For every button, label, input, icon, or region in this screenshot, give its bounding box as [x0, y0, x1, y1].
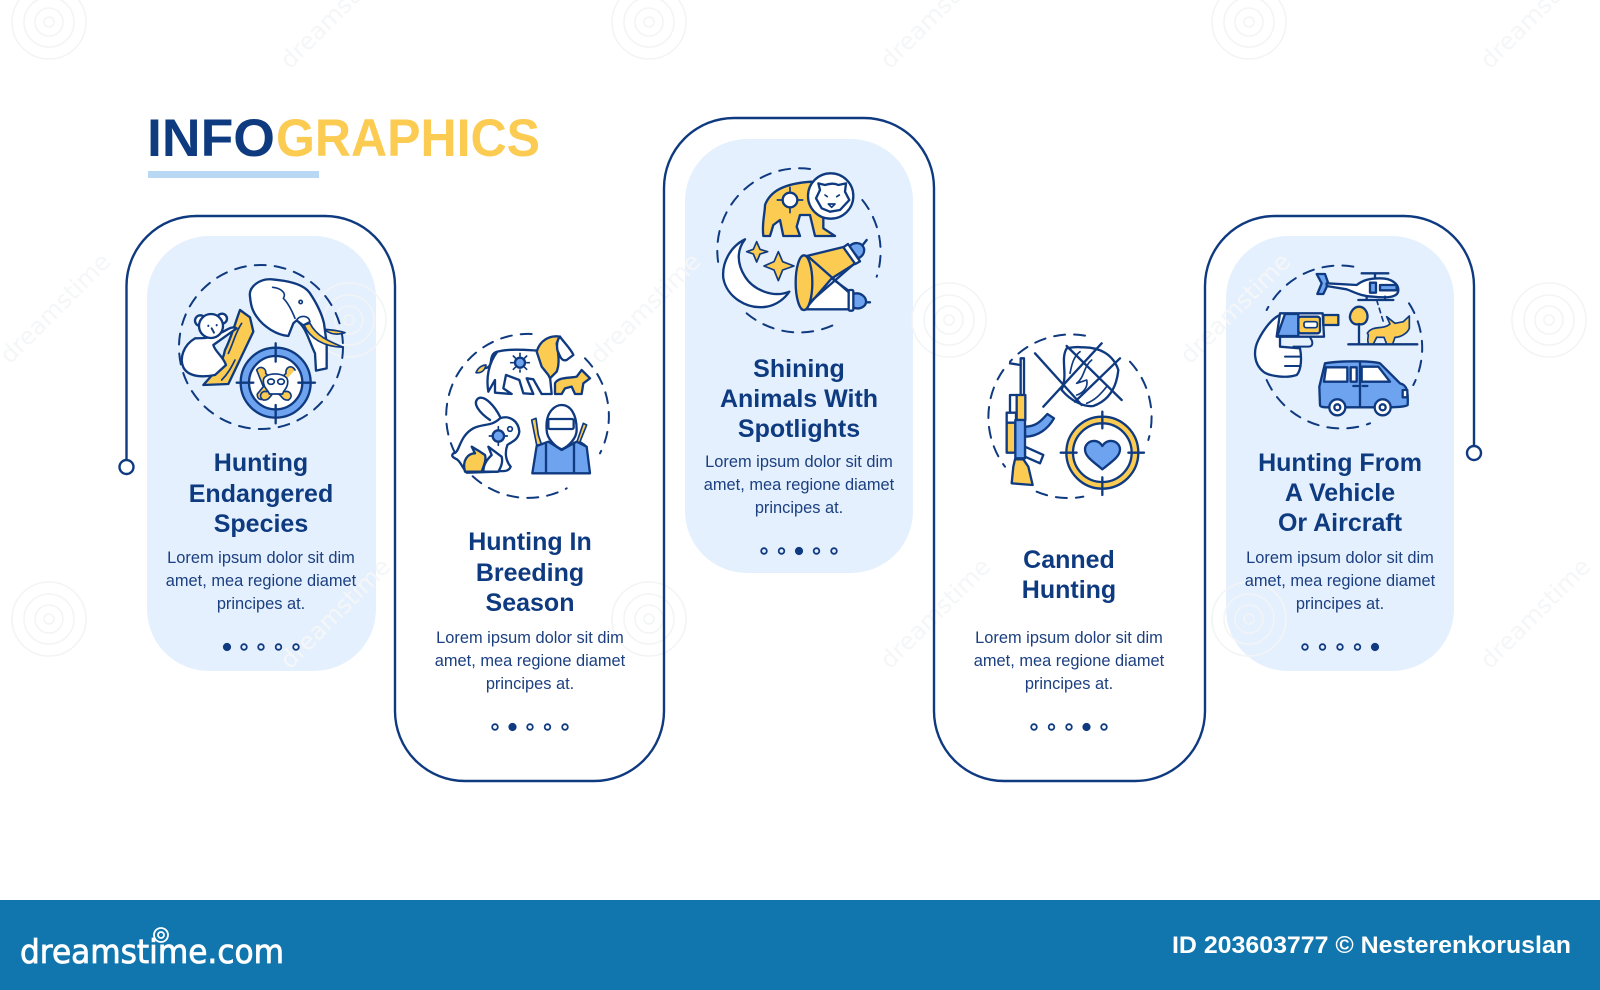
- timeline end dot: [1467, 446, 1481, 460]
- icon: canned hunting: [988, 334, 1152, 498]
- text: lorem shining animals: principes at.: [755, 499, 843, 517]
- footer logo text: dreamstime.com: [20, 932, 284, 971]
- footer bar: [0, 900, 1600, 990]
- title: shining animals with spotlights: Shining: [753, 355, 845, 383]
- title: hunting from a vehicle or aircraft: [1258, 449, 1422, 537]
- title: hunting in breeding season: Hunting In: [468, 528, 592, 556]
- title: hunting from a vehicle or aircraft: Hunting From: [1258, 449, 1422, 477]
- text: lorem endangered species: Lorem ipsum dolor sit dim: [167, 549, 355, 567]
- title: hunting in breeding season: Breeding: [476, 559, 584, 587]
- panel: shining animals background: [685, 139, 913, 573]
- title: hunting endangered species: Hunting: [214, 449, 308, 477]
- icon: breeding season: [446, 334, 609, 498]
- title: hunting from a vehicle or aircraft: Or Aircraft: [1278, 509, 1403, 537]
- title: canned hunting: Hunting: [1022, 576, 1116, 604]
- text: lorem vehicle or aircraft: principes at.: [1296, 595, 1384, 613]
- text: lorem breeding season: amet, mea regione diamet: [435, 652, 626, 670]
- text: lorem endangered species: [166, 549, 357, 613]
- step dots 4: [1031, 724, 1107, 730]
- icon: vehicle or aircraft: [1255, 266, 1422, 428]
- connecting timeline outline: [126, 118, 1474, 781]
- panel: vehicle or aircraft background: [1226, 236, 1454, 671]
- title: shining animals with spotlights: Spotlights: [738, 415, 860, 443]
- title: shining animals with spotlights: Animals With: [720, 385, 878, 413]
- text: lorem shining animals: amet, mea regione diamet: [704, 476, 895, 494]
- step dots 2: [492, 724, 568, 730]
- title: shining animals with spotlights: [720, 355, 878, 443]
- heading: GRAPHICS: [276, 109, 540, 168]
- title: canned hunting: Canned: [1023, 546, 1115, 574]
- text: lorem canned hunting: [974, 629, 1165, 693]
- title: hunting from a vehicle or aircraft: A Vehicle: [1285, 479, 1395, 507]
- title: hunting endangered species: [189, 449, 333, 538]
- text: lorem vehicle or aircraft: [1245, 549, 1436, 613]
- panel: endangered species background: [147, 236, 376, 671]
- text: lorem breeding season: Lorem ipsum dolor sit dim: [436, 629, 624, 647]
- watermark text: dreamstime: [1174, 248, 1296, 369]
- title: hunting in breeding season: [468, 528, 592, 617]
- timeline start dot: [120, 460, 134, 474]
- text: lorem breeding season: [435, 629, 626, 693]
- heading: [147, 109, 540, 168]
- heading underline: [148, 171, 319, 178]
- text: lorem endangered species: principes at.: [217, 595, 305, 613]
- text: lorem endangered species: amet, mea regione diamet: [166, 572, 357, 590]
- footer logo spiral: [154, 928, 168, 942]
- step dots 1: [224, 644, 299, 650]
- icon: shining animals: [717, 168, 881, 332]
- watermark text: [0, 0, 1596, 674]
- watermark text: dreamstime: [584, 248, 706, 369]
- footer credit: ID 203603777 © Nesterenkoruslan: [1172, 932, 1571, 959]
- text: lorem canned hunting: Lorem ipsum dolor sit dim: [975, 629, 1163, 647]
- text: lorem canned hunting: principes at.: [1025, 675, 1113, 693]
- title: canned hunting: [1022, 546, 1116, 604]
- text: lorem breeding season: principes at.: [486, 675, 574, 693]
- heading: INFO: [147, 109, 275, 168]
- text: lorem canned hunting: amet, mea regione diamet: [974, 652, 1165, 670]
- title: hunting in breeding season: Season: [486, 589, 574, 617]
- watermark text: dreamstime: [274, 553, 396, 674]
- text: lorem vehicle or aircraft: Lorem ipsum dolor sit dim: [1246, 549, 1434, 567]
- text: lorem shining animals: [704, 453, 895, 517]
- title: hunting endangered species: Endangered: [189, 480, 333, 508]
- watermark text: dreamstime: [1474, 553, 1596, 674]
- text: lorem vehicle or aircraft: amet, mea regione diamet: [1245, 572, 1436, 590]
- watermark spirals: [12, 0, 1586, 656]
- step dots 5: [1302, 644, 1378, 650]
- watermark text: dreamstime: [874, 553, 996, 674]
- text: lorem shining animals: Lorem ipsum dolor sit dim: [705, 453, 893, 471]
- title: hunting endangered species: Species: [214, 510, 308, 538]
- icon: endangered species: [179, 265, 345, 429]
- step dots 3: [761, 548, 837, 554]
